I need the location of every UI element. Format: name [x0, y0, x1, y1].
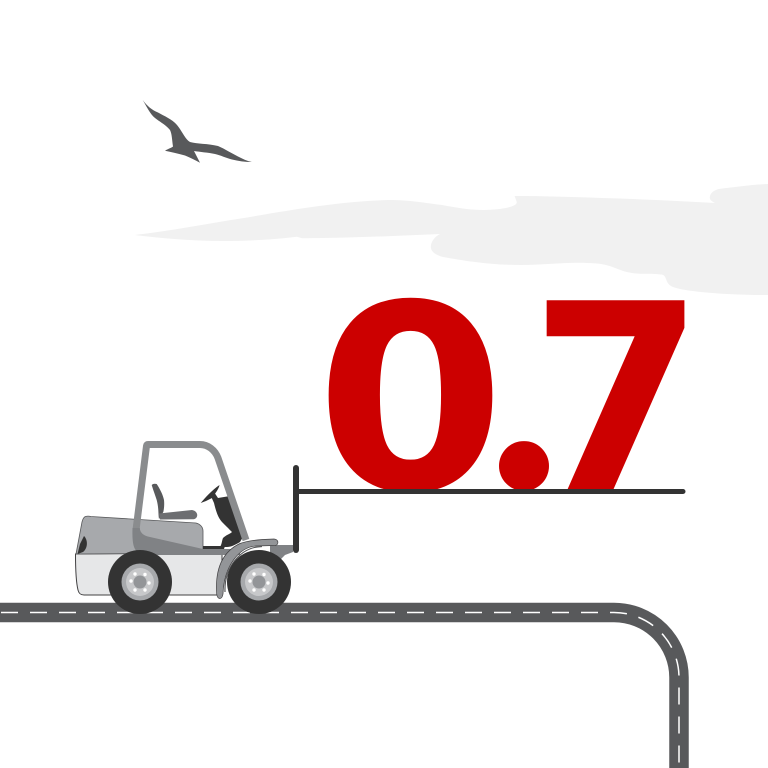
lower body — [76, 553, 222, 595]
road surface — [0, 612, 679, 768]
icon: bird — [143, 100, 252, 163]
road — [0, 612, 679, 768]
lane dashes — [1, 612, 679, 768]
seat back — [152, 484, 164, 519]
front plate — [270, 545, 293, 560]
seat base — [159, 510, 197, 520]
decimal point: . — [458, 231, 591, 563]
cloud — [134, 184, 768, 295]
big number 0.7 — [328, 298, 684, 489]
hood — [76, 516, 220, 554]
fender inner line — [225, 546, 262, 592]
mast — [293, 468, 299, 550]
body sill — [135, 549, 240, 555]
rear wheel — [108, 550, 172, 614]
frame base — [132, 528, 226, 553]
steering wheel — [201, 485, 220, 503]
rear light — [78, 536, 87, 554]
digit 0: 0 — [316, 250, 505, 550]
front wheel — [227, 550, 291, 614]
steering column and dash — [210, 492, 243, 547]
fender outer — [216, 539, 278, 598]
fork: mast and blades — [296, 468, 683, 550]
fork blade — [296, 489, 683, 494]
digit 7: 7 — [530, 250, 704, 552]
cab frame — [136, 444, 246, 540]
forklift — [76, 444, 293, 614]
black floor — [203, 546, 225, 549]
